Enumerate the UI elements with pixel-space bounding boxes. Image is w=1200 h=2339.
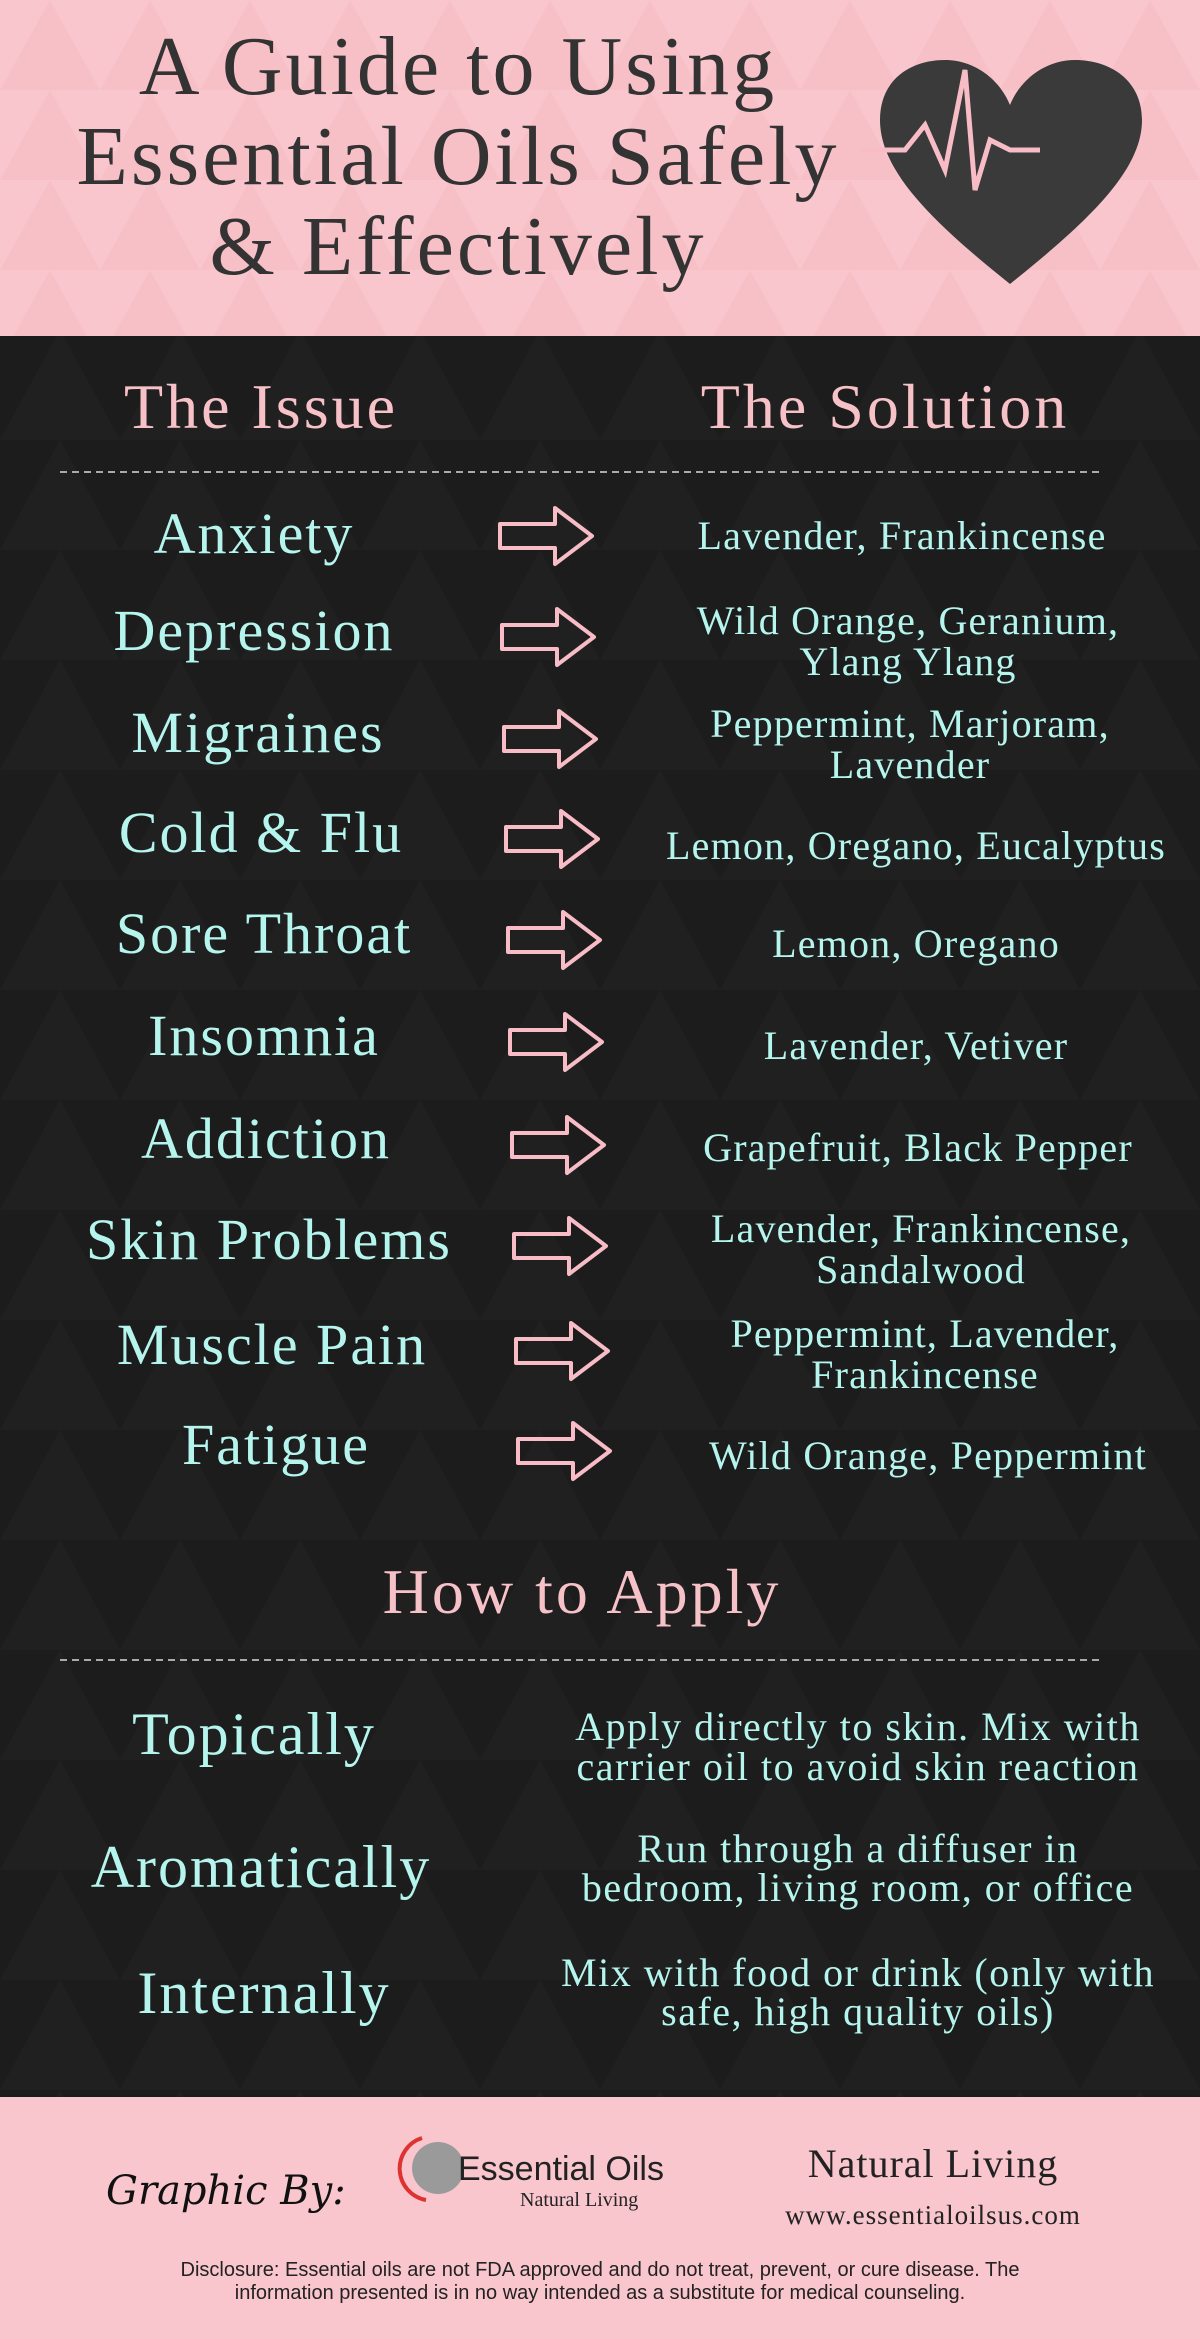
- logo: Natural Living: [520, 2189, 638, 2211]
- application descriptions: bedroom, living room, or office: [582, 1865, 1134, 1910]
- icon: heart with heartbeat: [860, 60, 1142, 284]
- issues list: Depression: [114, 598, 394, 663]
- header background: [0, 0, 1200, 336]
- column headings: [124, 371, 1069, 442]
- solutions list: Peppermint, Lavender,: [730, 1311, 1120, 1356]
- graphic by: Graphic By:: [106, 2168, 346, 2214]
- solutions list: Lemon, Oregano: [772, 921, 1060, 966]
- disclosure: Disclosure: Essential oils are not FDA approved and do not treat, prevent, or cure disease. The: [181, 2259, 1019, 2281]
- application descriptions: Mix with food or drink (only with: [561, 1950, 1155, 1995]
- heading: How to Apply: How to Apply: [383, 1556, 781, 1627]
- application descriptions: [561, 1704, 1155, 2034]
- footer background: [0, 2097, 1200, 2339]
- site name and url: www.essentialoilsus.com: [785, 2200, 1081, 2230]
- solutions list: Ylang Ylang: [799, 639, 1017, 684]
- issues list: Fatigue: [182, 1412, 370, 1477]
- application methods: Aromatically: [91, 1834, 431, 1900]
- arrows: [500, 508, 610, 1479]
- solutions list: Lavender, Vetiver: [764, 1023, 1068, 1068]
- issues list: Insomnia: [148, 1003, 380, 1068]
- application descriptions: Apply directly to skin. Mix with: [575, 1704, 1141, 1749]
- column headings: The Issue: [124, 371, 398, 442]
- application methods: [91, 1701, 431, 2026]
- issues list: Skin Problems: [86, 1207, 452, 1272]
- issues list: Muscle Pain: [117, 1312, 427, 1377]
- title: A Guide to Using: [139, 20, 777, 113]
- dark background: [0, 336, 1200, 2097]
- title: & Effectively: [210, 200, 706, 293]
- site name and url: [785, 2141, 1081, 2230]
- application descriptions: carrier oil to avoid skin reaction: [576, 1744, 1140, 1789]
- solutions list: [666, 513, 1166, 1478]
- solutions list: Frankincense: [811, 1352, 1039, 1397]
- solutions list: Lavender: [830, 742, 990, 787]
- site name and url: Natural Living: [808, 2141, 1058, 2186]
- solutions list: Sandalwood: [816, 1247, 1026, 1292]
- solutions list: Wild Orange, Peppermint: [709, 1433, 1147, 1478]
- disclosure: [181, 2259, 1019, 2304]
- issues list: Sore Throat: [116, 901, 412, 966]
- application methods: Internally: [137, 1960, 391, 2026]
- title: Essential Oils Safely: [77, 110, 839, 203]
- disclosure: information presented is in no way intended as a substitute for medical counseling.: [235, 2282, 965, 2304]
- issues list: Migraines: [131, 700, 385, 765]
- title: [77, 20, 839, 293]
- solutions list: Lavender, Frankincense,: [711, 1206, 1131, 1251]
- application descriptions: safe, high quality oils): [661, 1989, 1055, 2034]
- issues list: [86, 501, 452, 1477]
- logo: Essential Oils: [458, 2150, 664, 2188]
- issues list: Addiction: [141, 1106, 391, 1171]
- solutions list: Lavender, Frankincense: [697, 513, 1107, 558]
- application descriptions: Run through a diffuser in: [637, 1826, 1079, 1871]
- issues list: Anxiety: [154, 501, 354, 566]
- issues list: Cold & Flu: [119, 800, 403, 865]
- column headings: The Solution: [701, 371, 1069, 442]
- solutions list: Peppermint, Marjoram,: [710, 701, 1110, 746]
- logo: [400, 2138, 664, 2211]
- solutions list: Wild Orange, Geranium,: [697, 598, 1119, 643]
- solutions list: Grapefruit, Black Pepper: [703, 1125, 1133, 1170]
- application methods: Topically: [132, 1701, 376, 1767]
- solutions list: Lemon, Oregano, Eucalyptus: [666, 823, 1166, 868]
